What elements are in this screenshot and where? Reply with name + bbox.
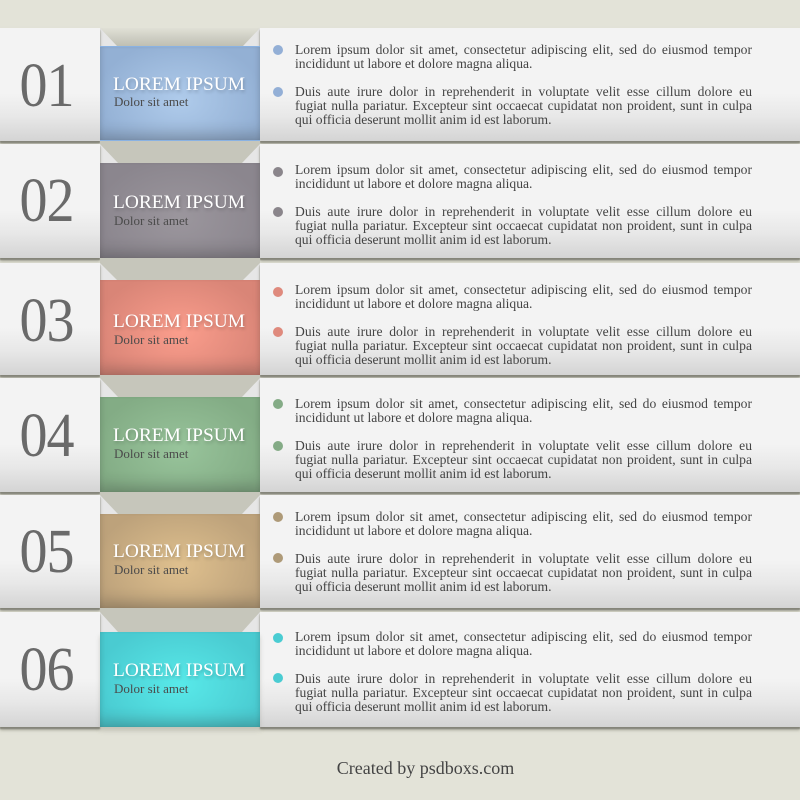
bullet <box>273 87 283 97</box>
body text: qui officia deserunt mollit anim id est laborum. <box>295 232 551 247</box>
body text: fugiat nulla pariatur. Excepteur sint occaecat cupidatat non proident, sunt in culpa <box>295 685 752 700</box>
label subtitle: Dolor sit amet <box>114 94 188 109</box>
body text <box>295 629 752 714</box>
body text: qui officia deserunt mollit anim id est laborum. <box>295 579 551 594</box>
label title: LOREM IPSUM <box>113 74 245 95</box>
bullet <box>273 399 283 409</box>
text panel <box>260 28 800 141</box>
fold band <box>100 28 260 46</box>
body text: qui officia deserunt mollit anim id est laborum. <box>295 112 551 127</box>
body text: incididunt ut labore et dolore magna aliqua. <box>295 643 532 658</box>
bullet <box>273 167 283 177</box>
text panel <box>260 612 800 727</box>
number panel <box>0 144 100 258</box>
bullet <box>273 45 283 55</box>
body text <box>295 509 752 594</box>
body text: Lorem ipsum dolor sit amet, consectetur adipiscing elit, sed do eiusmod tempor <box>295 509 752 524</box>
fold band <box>100 258 260 280</box>
body text <box>295 396 752 481</box>
number: 04 <box>20 401 74 471</box>
body text: Lorem ipsum dolor sit amet, consectetur adipiscing elit, sed do eiusmod tempor <box>295 629 752 644</box>
body text: Duis aute irure dolor in reprehenderit in voluptate velit esse cillum dolore eu <box>295 324 752 339</box>
fold corners <box>100 263 260 280</box>
text panel <box>260 378 800 492</box>
text panel <box>260 495 800 608</box>
label title: LOREM IPSUM <box>113 541 245 562</box>
row 1 <box>0 28 800 144</box>
body text: fugiat nulla pariatur. Excepteur sint occaecat cupidatat non proident, sunt in culpa <box>295 452 752 467</box>
row 6 <box>0 608 800 732</box>
label title: LOREM IPSUM <box>113 425 245 446</box>
label subtitle: Dolor sit amet <box>114 446 188 461</box>
number: 01 <box>20 51 74 121</box>
body text: Duis aute irure dolor in reprehenderit in voluptate velit esse cillum dolore eu <box>295 84 752 99</box>
body text: incididunt ut labore et dolore magna aliqua. <box>295 523 532 538</box>
body text <box>295 42 752 127</box>
bullet <box>273 673 283 683</box>
row 5 <box>0 492 800 612</box>
colour label <box>100 163 260 258</box>
row 2 <box>0 141 800 263</box>
label title: LOREM IPSUM <box>113 311 245 332</box>
body text: qui officia deserunt mollit anim id est laborum. <box>295 699 551 714</box>
label subtitle: Dolor sit amet <box>114 681 188 696</box>
body text: fugiat nulla pariatur. Excepteur sint occaecat cupidatat non proident, sunt in culpa <box>295 218 752 233</box>
body text: Lorem ipsum dolor sit amet, consectetur adipiscing elit, sed do eiusmod tempor <box>295 396 752 411</box>
number: 05 <box>20 517 74 587</box>
number panel <box>0 378 100 492</box>
body text: Duis aute irure dolor in reprehenderit in voluptate velit esse cillum dolore eu <box>295 551 752 566</box>
fold corners <box>100 495 260 514</box>
number panel <box>0 495 100 608</box>
colour label <box>100 514 260 608</box>
fold band <box>100 492 260 514</box>
body text: Lorem ipsum dolor sit amet, consectetur adipiscing elit, sed do eiusmod tempor <box>295 42 752 57</box>
bullet <box>273 512 283 522</box>
body text: qui officia deserunt mollit anim id est laborum. <box>295 352 551 367</box>
body text: incididunt ut labore et dolore magna aliqua. <box>295 176 532 191</box>
body text <box>295 282 752 367</box>
body text: incididunt ut labore et dolore magna aliqua. <box>295 56 532 71</box>
label subtitle: Dolor sit amet <box>114 562 188 577</box>
row 3 <box>0 258 800 378</box>
fold band <box>100 608 260 632</box>
label subtitle: Dolor sit amet <box>114 213 188 228</box>
label title: LOREM IPSUM <box>113 192 245 213</box>
body text <box>295 162 752 247</box>
body text: Duis aute irure dolor in reprehenderit in voluptate velit esse cillum dolore eu <box>295 204 752 219</box>
bullet <box>273 553 283 563</box>
bullet <box>273 287 283 297</box>
number panel <box>0 28 100 141</box>
colour label <box>100 46 260 141</box>
number: 02 <box>20 166 74 236</box>
body text: qui officia deserunt mollit anim id est laborum. <box>295 466 551 481</box>
number panel <box>0 263 100 375</box>
body text: incididunt ut labore et dolore magna aliqua. <box>295 296 532 311</box>
body text: Lorem ipsum dolor sit amet, consectetur adipiscing elit, sed do eiusmod tempor <box>295 282 752 297</box>
fold corners <box>100 378 260 397</box>
colour label <box>100 280 260 375</box>
fold corners <box>100 28 260 46</box>
body text: Duis aute irure dolor in reprehenderit in voluptate velit esse cillum dolore eu <box>295 671 752 686</box>
label subtitle: Dolor sit amet <box>114 332 188 347</box>
fold band <box>100 375 260 397</box>
fold band <box>100 141 260 163</box>
fold corners <box>100 612 260 632</box>
body text: Lorem ipsum dolor sit amet, consectetur adipiscing elit, sed do eiusmod tempor <box>295 162 752 177</box>
label title: LOREM IPSUM <box>113 660 245 681</box>
bullet <box>273 207 283 217</box>
fold corners <box>100 144 260 163</box>
bullet <box>273 441 283 451</box>
body text: Duis aute irure dolor in reprehenderit in voluptate velit esse cillum dolore eu <box>295 438 752 453</box>
text panel <box>260 263 800 375</box>
colour label <box>100 397 260 492</box>
footer credit: Created by psdboxs.com <box>337 758 514 778</box>
body text: incididunt ut labore et dolore magna aliqua. <box>295 410 532 425</box>
body text: fugiat nulla pariatur. Excepteur sint occaecat cupidatat non proident, sunt in culpa <box>295 565 752 580</box>
text panel <box>260 144 800 258</box>
body text: fugiat nulla pariatur. Excepteur sint occaecat cupidatat non proident, sunt in culpa <box>295 338 752 353</box>
number panel <box>0 612 100 727</box>
row 4 <box>0 375 800 495</box>
bullet <box>273 327 283 337</box>
number: 06 <box>20 635 74 705</box>
body text: fugiat nulla pariatur. Excepteur sint occaecat cupidatat non proident, sunt in culpa <box>295 98 752 113</box>
bullet <box>273 633 283 643</box>
number: 03 <box>20 286 74 356</box>
colour label <box>100 632 260 727</box>
